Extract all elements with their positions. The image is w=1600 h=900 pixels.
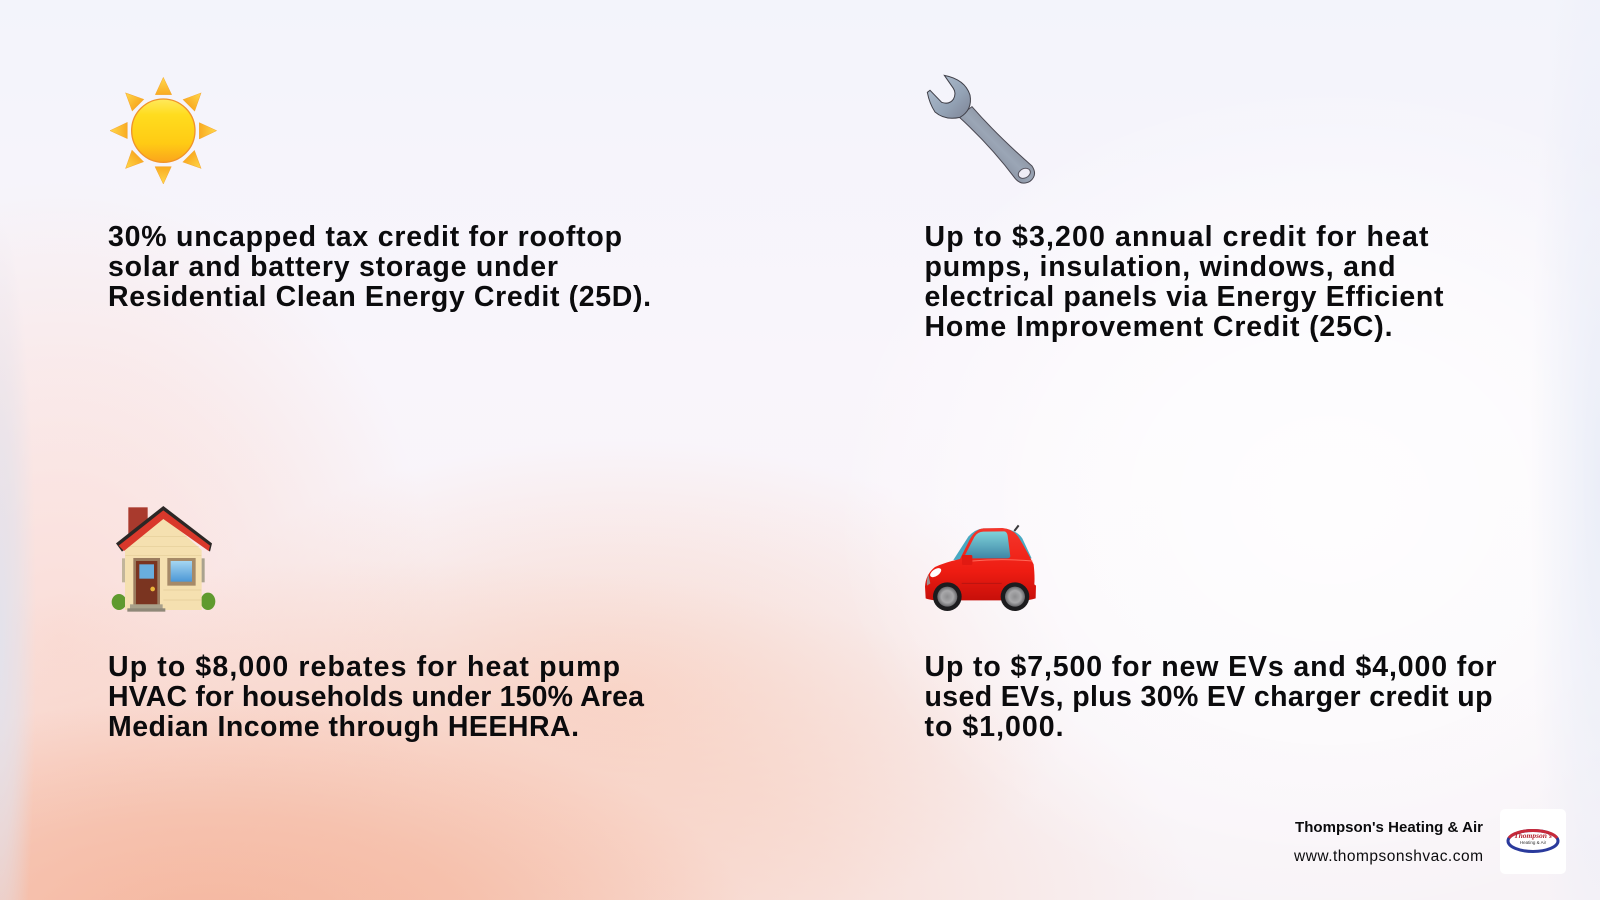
text: home improvement credit: Home Improvement Credit (25C). <box>924 311 1392 343</box>
text: home improvement credit: electrical panels via Energy Efficient <box>924 281 1444 313</box>
text: solar credit: 30% uncapped tax credit for rooftop <box>108 221 622 253</box>
footer: company name and website <box>1293 819 1483 865</box>
icon: wrench <box>927 75 1035 183</box>
text: EV credits: used EVs, plus 30% EV charger credit up <box>924 681 1492 713</box>
icon: car <box>925 525 1036 611</box>
logo card: Heating & Air <box>1520 840 1547 845</box>
text: HEEHRA rebates: HVAC for households under 150% Area <box>108 681 645 713</box>
panel: EV credits <box>924 525 1505 743</box>
text: home improvement credit: pumps, insulation, windows, and <box>924 251 1396 283</box>
text: home improvement credit: Up to $3,200 annual credit for heat <box>924 221 1429 253</box>
panel: HEEHRA rebates <box>108 506 652 743</box>
text: HEEHRA rebates: Up to $8,000 rebates for heat pump <box>108 651 620 683</box>
panel: solar credit <box>108 77 651 313</box>
panel: home improvement credit <box>924 75 1452 343</box>
text: solar credit: solar and battery storage under <box>108 251 558 283</box>
footer: company name and website: Thompson's Heating & Air <box>1295 819 1483 836</box>
text: solar credit: Residential Clean Energy Credit (25D). <box>108 281 651 313</box>
text: EV credits: Up to $7,500 for new EVs and $4,000 for <box>924 651 1496 683</box>
text: HEEHRA rebates: Median Income through HEEHRA. <box>108 711 579 743</box>
logo card: Thompson's <box>1514 831 1552 840</box>
icon: sun <box>110 77 217 184</box>
footer: company name and website: www.thompsonshvac.com <box>1293 848 1483 865</box>
logo card <box>1500 809 1566 874</box>
text: EV credits: to $1,000. <box>924 711 1064 743</box>
icon: house <box>112 506 215 612</box>
